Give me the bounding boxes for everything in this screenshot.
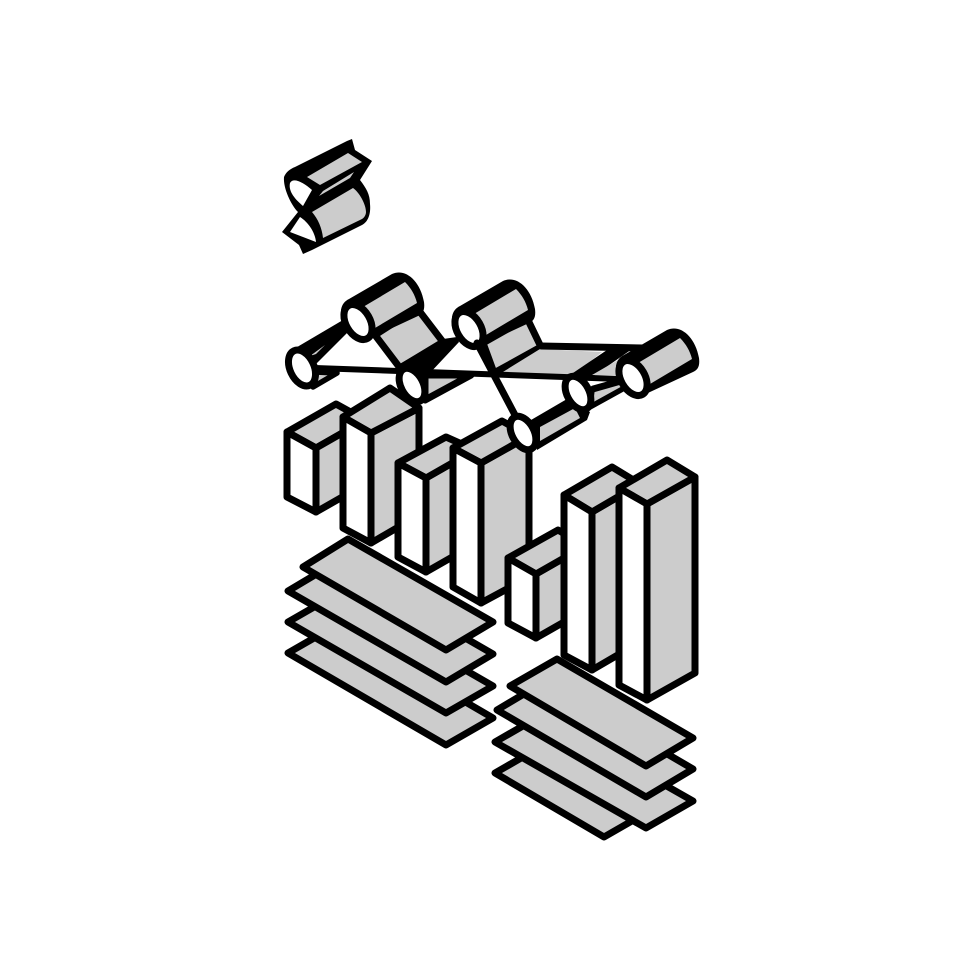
icon: small S-shaped ribbon <box>282 139 372 254</box>
stacked plates: right <box>495 659 693 837</box>
line: top edge of wide plate <box>541 346 643 348</box>
wedge from plate to node C <box>398 337 459 378</box>
bar 6 <box>564 467 640 670</box>
bar 3 <box>398 437 475 572</box>
line: long connector from left node to right cylinder <box>315 368 620 379</box>
cylinder G <box>613 328 699 400</box>
bar chart: left group <box>287 388 541 603</box>
node C <box>394 364 430 406</box>
bar 7 <box>619 460 695 700</box>
plate 4 <box>495 746 651 837</box>
cylinder B <box>338 272 424 344</box>
connector: left node to cylinder B <box>287 320 348 387</box>
band: node E to node F <box>531 399 590 450</box>
bar 5 <box>508 530 585 638</box>
bar 4 <box>453 421 529 603</box>
plate under cylinder D with wide extension <box>483 318 635 377</box>
plate 2 <box>497 682 693 797</box>
bar 2 <box>343 388 419 543</box>
line: cylinder D to node E <box>477 343 515 415</box>
stacked plates: left <box>288 539 493 745</box>
node F <box>560 372 596 414</box>
network diagram of cylinders and nodes <box>283 272 699 450</box>
band: node F to cylinder G <box>589 380 628 407</box>
plate 3 <box>288 595 493 713</box>
cylinder D <box>449 279 535 351</box>
bar 1 <box>287 404 365 512</box>
bar chart: right group <box>508 460 695 700</box>
node E on top of bar 4 <box>505 412 541 454</box>
plate 1 <box>303 539 493 650</box>
node: far-left <box>283 346 321 390</box>
plate 4 <box>288 626 493 745</box>
plate 2 <box>288 563 493 682</box>
plate 1 <box>510 659 693 766</box>
plate 3 <box>495 715 693 828</box>
band: node C to right <box>425 375 471 400</box>
plate under cylinder B <box>375 308 443 368</box>
